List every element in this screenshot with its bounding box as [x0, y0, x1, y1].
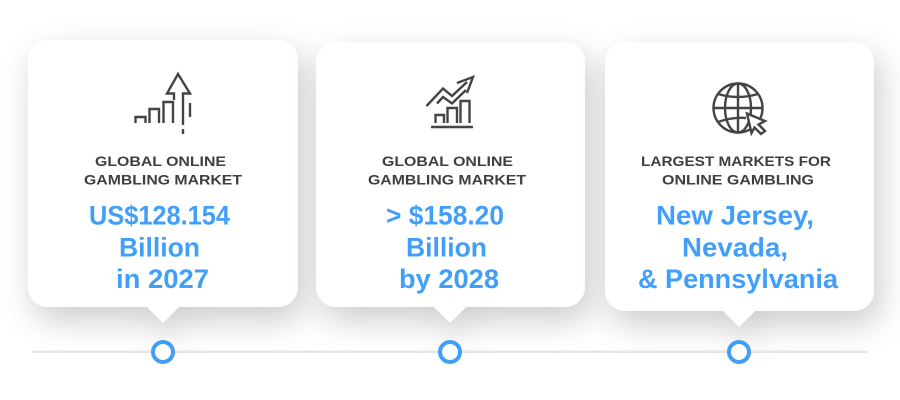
card 1 value: US$128.154	[89, 200, 230, 230]
card 1 value: Billion	[119, 232, 200, 262]
timeline marker 1	[153, 342, 173, 362]
card 1 value	[89, 200, 230, 294]
timeline marker 3	[729, 342, 749, 362]
card 3 with pointer	[605, 42, 874, 327]
card 1 value: in 2027	[116, 264, 209, 294]
card 3 heading: LARGEST MARKETS FOR	[641, 153, 831, 169]
card 3 heading	[641, 153, 831, 188]
card 3 value	[638, 200, 839, 294]
card 3 value: New Jersey,	[656, 200, 814, 230]
timeline line	[32, 350, 868, 353]
card 3 heading: ONLINE GAMBLING	[662, 172, 814, 188]
card 2 with pointer	[316, 42, 585, 323]
card 2 heading: GAMBLING MARKET	[368, 172, 526, 188]
card 2 value: > $158.20	[386, 200, 504, 230]
icon: chart with trend arrow	[426, 77, 473, 127]
card 1 heading: GLOBAL ONLINE	[95, 153, 226, 169]
card 1 heading	[84, 153, 242, 188]
timeline marker 2	[440, 342, 460, 362]
panel: global online gambling market 2028	[316, 42, 585, 323]
card 3 value: Nevada,	[682, 232, 788, 262]
card 2 value: Billion	[406, 232, 487, 262]
card 1 heading: GAMBLING MARKET	[84, 172, 242, 188]
card 2 heading: GLOBAL ONLINE	[382, 153, 513, 169]
card 2 heading	[368, 153, 526, 188]
panel: global online gambling market 2027	[28, 40, 298, 323]
panel: largest markets	[605, 42, 874, 327]
card 1 with pointer	[28, 40, 298, 323]
card 3 value: & Pennsylvania	[638, 264, 839, 294]
card 2 value: by 2028	[399, 264, 499, 294]
icon: rising bars with arrow	[136, 74, 190, 134]
card 2 value	[386, 200, 504, 294]
icon: globe with cursor	[714, 84, 765, 134]
